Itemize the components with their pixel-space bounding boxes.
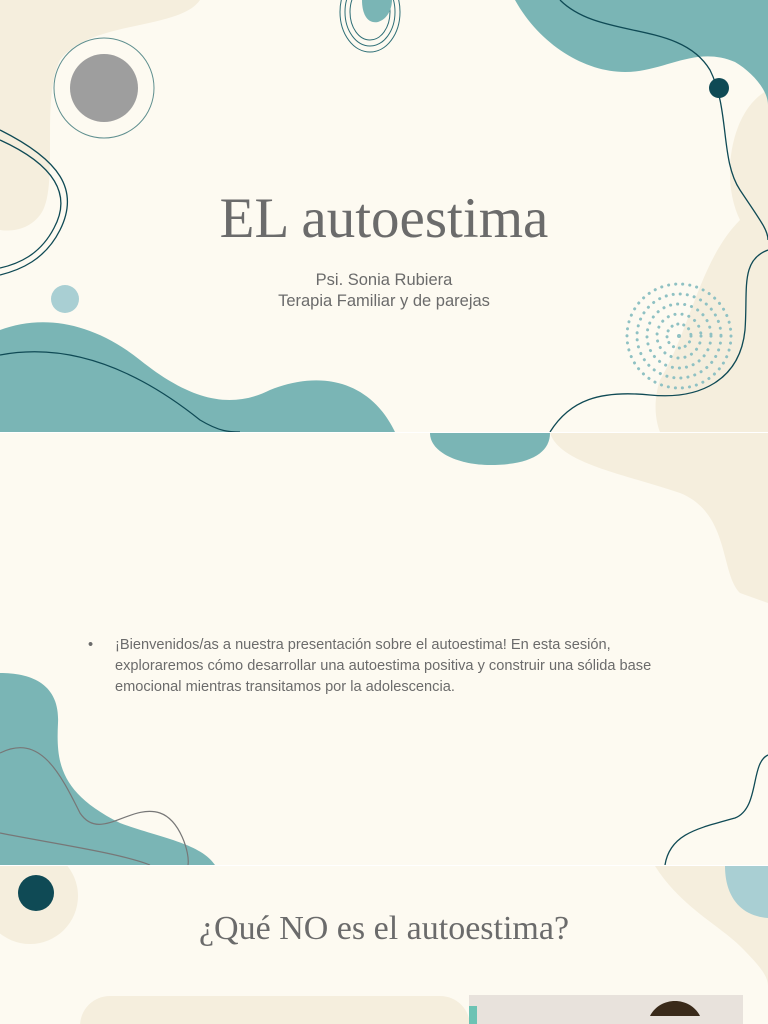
slide 2: welcome: •: [88, 637, 93, 653]
heading: ¿Qué NO es el autoestima?: [199, 910, 569, 947]
icon: grey circle: [54, 38, 154, 138]
subtitle: Psi. Sonia Rubiera: [316, 271, 452, 289]
slide 2: welcome: [0, 433, 768, 865]
teal blob bottom left: [0, 322, 395, 432]
subtitle: Terapia Familiar y de parejas: [278, 292, 490, 310]
dotted spiral: [627, 284, 731, 388]
bullet text: ¡Bienvenidos/as a nuestra presentación sobre el autoestima! En esta sesión, exploraremos cómo desarrollar una autoestima positiva y construir una sólida base emocional mientras transitamos por la adolescencia.: [115, 637, 651, 695]
beige blobs: [0, 0, 768, 432]
contour rings top: [340, 0, 400, 52]
teal blob top right: [515, 0, 768, 105]
slide 1: title: [0, 0, 768, 432]
subtitle: [278, 271, 490, 310]
dark lines: [0, 0, 768, 432]
title: EL autoestima: [220, 187, 548, 250]
slide 3: que no es: [0, 866, 768, 1024]
